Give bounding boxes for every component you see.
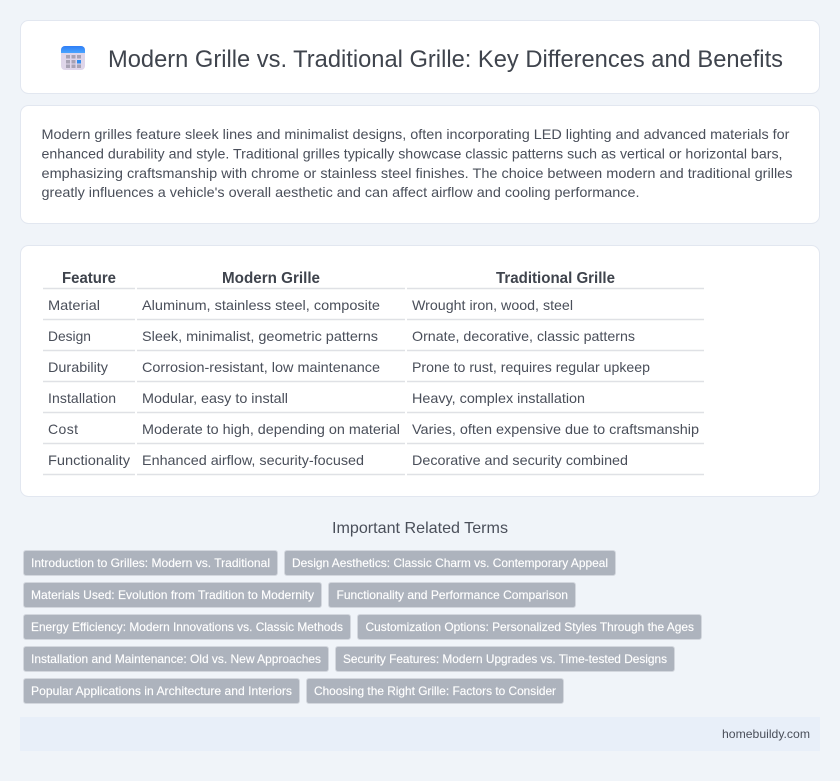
table row: installation: Installation: [48, 390, 116, 406]
tag: [328, 582, 576, 608]
table row: durability: Corrosion-resistant, low maintenance: [142, 359, 380, 375]
table header row: Modern Grille: [222, 270, 320, 287]
tag: [24, 582, 322, 608]
tag: [284, 550, 616, 576]
tag: Choosing the Right Grille: Factors to Consider: [314, 684, 556, 698]
table row: functionality: Functionality: [48, 452, 130, 468]
panel: comparison table: [20, 246, 820, 496]
tag: [24, 614, 350, 640]
table row: material: Material: [48, 297, 100, 313]
panel: header: [20, 20, 820, 94]
table row: installation: Modular, easy to install: [142, 390, 288, 406]
table row: cost: Varies, often expensive due to craftsmanship: [412, 421, 699, 437]
tag: [358, 614, 702, 640]
footer source text: homebuildy.com: [722, 727, 810, 741]
tag: Installation and Maintenance: Old vs. New Approaches: [31, 652, 321, 666]
tag: Functionality and Performance Comparison: [336, 588, 568, 602]
text block: introduction: Modern grilles feature sleek lines and minimalist designs, often incorporating LED lighting and advanced materials for: [42, 126, 790, 142]
table row: installation: Heavy, complex installation: [412, 390, 585, 406]
tag: Materials Used: Evolution from Tradition to Modernity: [31, 588, 314, 602]
table row: design: Design: [48, 328, 91, 344]
tag: Customization Options: Personalized Styles Through the Ages: [366, 620, 694, 634]
tag: [24, 646, 328, 672]
table row: functionality: Decorative and security combined: [412, 452, 628, 468]
table row: design: [48, 328, 635, 344]
tag: Security Features: Modern Upgrades vs. Time-tested Designs: [343, 652, 667, 666]
tag: Introduction to Grilles: Modern vs. Traditional: [31, 556, 270, 570]
tag: Design Aesthetics: Classic Charm vs. Contemporary Appeal: [292, 556, 608, 570]
table row: cost: Cost: [48, 421, 78, 437]
tag: [24, 550, 278, 576]
related terms tags: [24, 550, 702, 704]
tag: Popular Applications in Architecture and Interiors: [31, 684, 292, 698]
table header row: [62, 270, 615, 287]
table row: durability: [48, 359, 650, 375]
table row: material: Aluminum, stainless steel, composite: [142, 297, 380, 313]
tag: [336, 646, 674, 672]
text block: introduction: greatly influences a vehicle's overall aesthetic and can affect airflow and cooling performance.: [42, 184, 640, 200]
panel: introduction: [20, 106, 820, 224]
table row: material: [48, 297, 573, 313]
table row: design: Ornate, decorative, classic patterns: [412, 328, 635, 344]
table row: installation: [48, 390, 585, 406]
table header row: Traditional Grille: [496, 270, 615, 287]
text block: introduction: enhanced durability and style. Traditional grilles typically showcase classic patterns such as vertical or horizontal bars,: [42, 146, 782, 162]
table row: cost: Moderate to high, depending on material: [142, 421, 400, 437]
table row: material: Wrought iron, wood, steel: [412, 297, 573, 313]
table row: durability: Durability: [48, 359, 108, 375]
table row: functionality: [48, 452, 628, 468]
heading: important related terms: Important Related Terms: [332, 520, 508, 537]
tag: [306, 678, 564, 704]
text block: introduction: emphasizing craftsmanship with chrome or stainless steel finishes. The choice between modern and traditional grilles: [42, 165, 792, 181]
table row: design: Sleek, minimalist, geometric patterns: [142, 328, 378, 344]
table header row: Feature: [62, 270, 116, 287]
title: Modern Grille vs. Traditional Grille: Key Differences and Benefits: [108, 46, 783, 73]
tag: Energy Efficiency: Modern Innovations vs. Classic Methods: [31, 620, 343, 634]
table row: cost: [48, 421, 699, 437]
icon: calendar: [61, 46, 85, 70]
tag: [24, 678, 300, 704]
text block: introduction: [42, 126, 792, 200]
table row: functionality: Enhanced airflow, security-focused: [142, 452, 364, 468]
table row: durability: Prone to rust, requires regular upkeep: [412, 359, 650, 375]
footer: [20, 717, 820, 751]
